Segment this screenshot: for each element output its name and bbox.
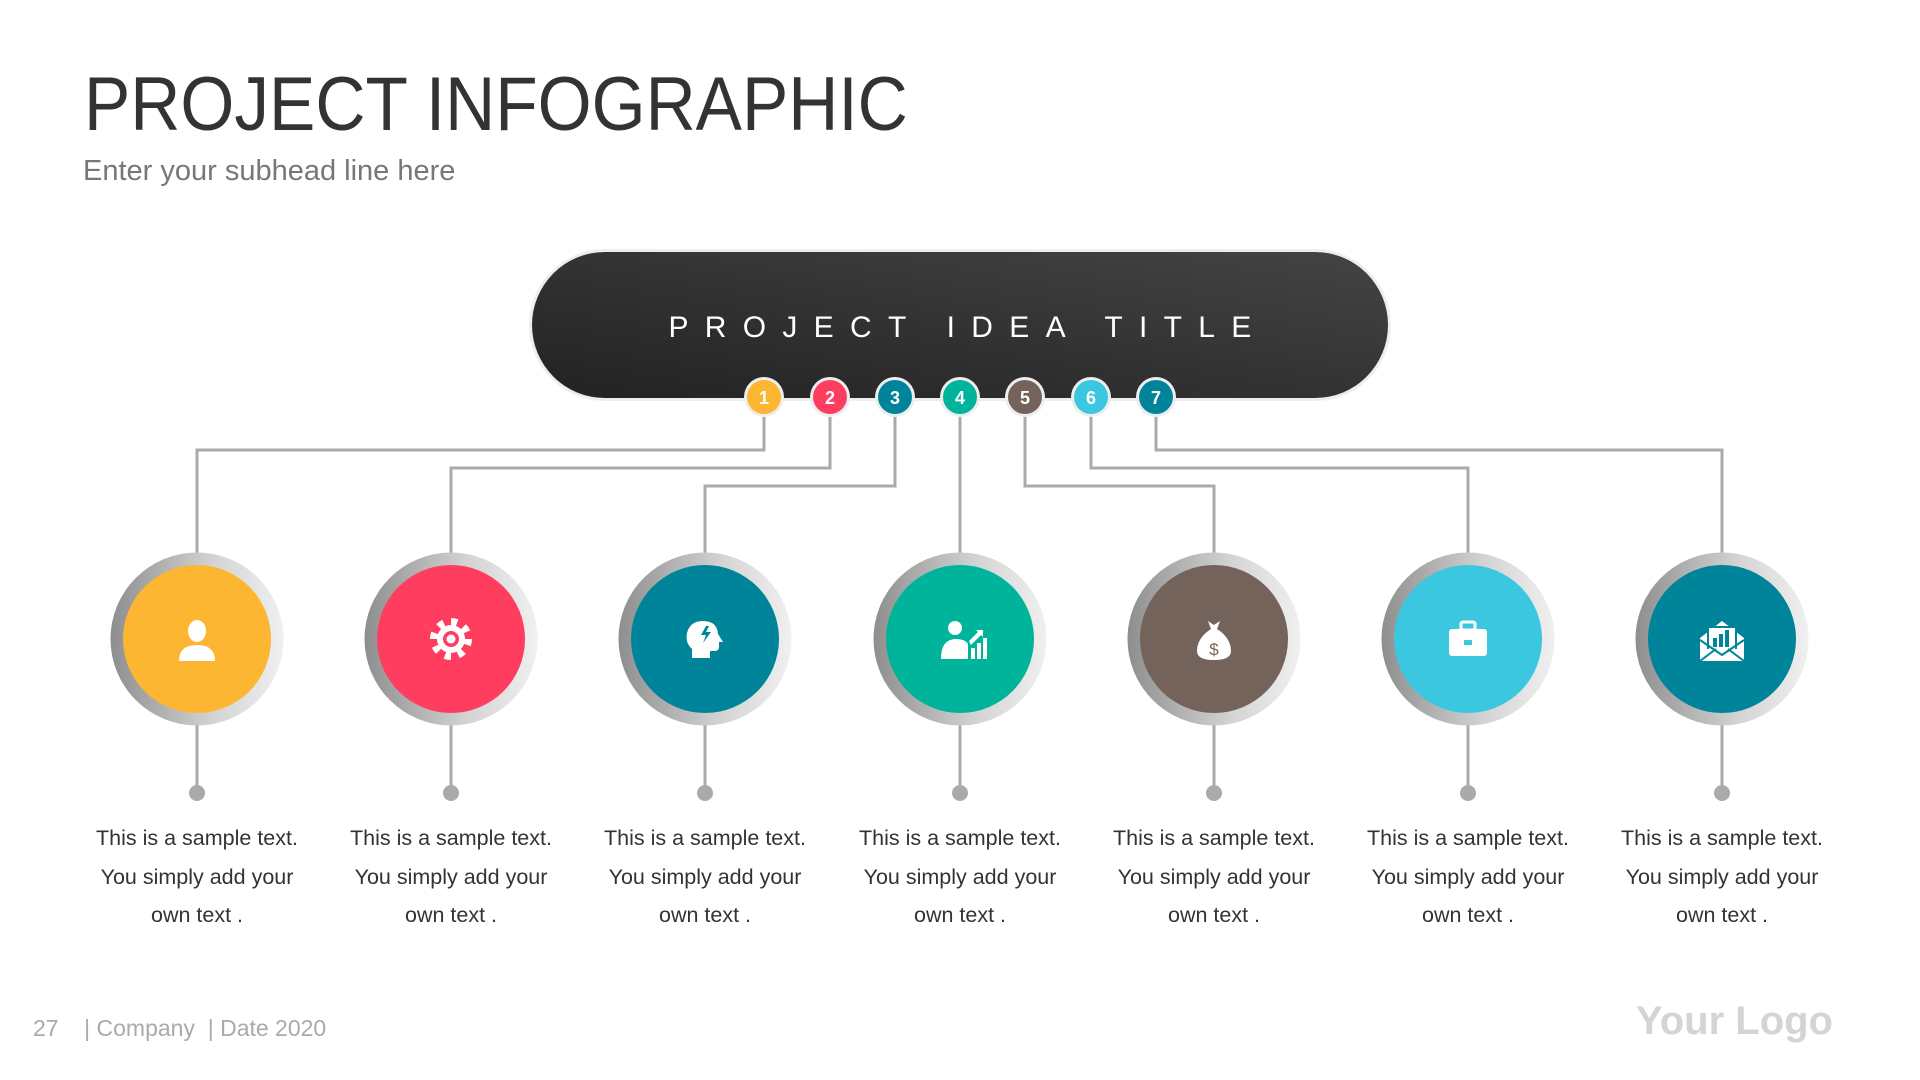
text block 7	[1621, 826, 1823, 927]
number badges: 3	[890, 388, 900, 408]
text block 5: This is a sample text.	[1113, 826, 1315, 850]
text block 2: This is a sample text.	[350, 826, 552, 850]
circle 3: head with idea	[618, 552, 792, 726]
text block 6: You simply add your	[1372, 864, 1564, 888]
number badges: 5	[1020, 388, 1030, 408]
number badges: 7	[1151, 388, 1161, 408]
text block 5: You simply add your	[1118, 864, 1310, 888]
text block 7: You simply add your	[1626, 864, 1818, 888]
text block 4: You simply add your	[864, 864, 1056, 888]
connector lines	[197, 397, 1722, 793]
number badges: 6	[1086, 388, 1096, 408]
number badges: 4	[955, 388, 965, 408]
text block 4: This is a sample text.	[859, 826, 1061, 850]
text block 7: This is a sample text.	[1621, 826, 1823, 850]
end dots	[189, 785, 1730, 801]
text block 1	[96, 826, 298, 927]
text block 1: own text .	[151, 903, 243, 927]
text block 1: This is a sample text.	[96, 826, 298, 850]
text block 6	[1367, 826, 1569, 927]
pill: project idea title	[529, 249, 1391, 401]
text block 2: own text .	[405, 903, 497, 927]
text block 1: You simply add your	[101, 864, 293, 888]
text block 6: own text .	[1422, 903, 1514, 927]
circle 2: gear	[364, 552, 538, 726]
text block 3: own text .	[659, 903, 751, 927]
text block 6: This is a sample text.	[1367, 826, 1569, 850]
number badges	[744, 377, 1176, 417]
text block 3	[604, 826, 806, 927]
circle 6: briefcase	[1382, 552, 1554, 726]
text block 7: own text .	[1676, 903, 1768, 927]
title: PROJECT INFOGRAPHIC	[84, 62, 908, 147]
text block 5	[1113, 826, 1315, 927]
text block 2: You simply add your	[355, 864, 547, 888]
text block 3: This is a sample text.	[604, 826, 806, 850]
circle 1: person	[110, 552, 284, 726]
text block 4: own text .	[914, 903, 1006, 927]
text block 3: You simply add your	[609, 864, 801, 888]
pill: project idea title: PROJECT IDEA TITLE	[668, 311, 1268, 344]
footer: 27 | Company | Date 2020	[33, 1015, 326, 1041]
number badges: 2	[825, 388, 835, 408]
logo: Your Logo	[1636, 999, 1833, 1043]
text block 4	[859, 826, 1061, 927]
circle 5: money bag: $	[1209, 640, 1219, 659]
subhead: Enter your subhead line here	[83, 155, 455, 187]
text block 5: own text .	[1168, 903, 1260, 927]
number badges: 1	[759, 388, 769, 408]
circle 5: money bag	[1128, 552, 1300, 726]
circle 7: envelope chart	[1636, 552, 1808, 726]
text block 2	[350, 826, 552, 927]
circle 4: person with chart	[874, 552, 1046, 726]
